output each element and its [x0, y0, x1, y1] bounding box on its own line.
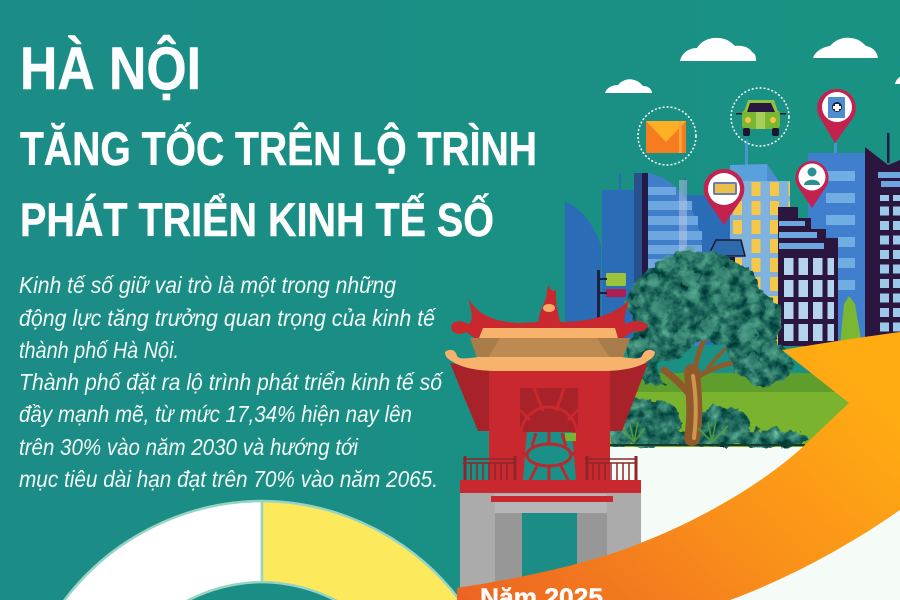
icon: battery pin — [704, 169, 744, 225]
icon: car — [731, 88, 789, 146]
intro text block: trên 30% vào năm 2030 và hướng tới — [19, 434, 359, 460]
orange growth arrow — [457, 332, 900, 600]
title — [20, 35, 537, 246]
intro text block: thành phố Hà Nội. — [19, 337, 179, 363]
intro text block — [19, 272, 444, 492]
upper roof — [451, 285, 648, 340]
round window — [520, 388, 578, 480]
trunk — [664, 340, 735, 438]
street sign — [597, 270, 626, 318]
yellow window building — [730, 140, 790, 346]
lower roof — [445, 350, 655, 371]
back buildings — [565, 173, 740, 350]
curved glass building — [634, 173, 702, 346]
tree — [622, 247, 795, 442]
small green cypress — [840, 296, 862, 345]
title: HÀ NỘI — [20, 35, 201, 102]
intro text block: đầy mạnh mẽ, từ mức 17,34% hiện nay lên — [19, 401, 412, 427]
foliage highlights — [632, 247, 777, 369]
crest eye — [543, 304, 555, 312]
right dark tower — [865, 133, 900, 345]
icon: envelope — [638, 107, 696, 165]
intro text block: Kinh tế số giữ vai trò là một trong những — [19, 272, 396, 298]
red base — [460, 480, 641, 493]
stepped dark building — [778, 207, 838, 346]
balustrade left — [463, 456, 515, 480]
green lawn — [610, 373, 850, 447]
icon: person pin — [795, 161, 829, 208]
intro text block: mục tiêu dài hạn đạt trên 70% vào năm 2065. — [19, 466, 438, 492]
intro text block: Thành phố đặt ra lộ trình phát triển kinh tế số — [19, 369, 444, 395]
icon: medical pin — [817, 89, 856, 143]
grey gate — [460, 493, 641, 593]
foliage — [625, 250, 795, 388]
title: TĂNG TỐC TRÊN LỘ TRÌNH — [20, 122, 537, 175]
city skyline — [565, 133, 900, 350]
light blue tower — [808, 143, 865, 348]
pavilion — [445, 285, 655, 593]
solar panel — [708, 240, 745, 269]
clouds — [605, 38, 900, 93]
shrubs — [609, 399, 808, 447]
tan roof body — [470, 338, 630, 358]
intro text block: động lực tăng trưởng quan trọng của kinh tế — [19, 305, 437, 331]
balustrade right — [585, 456, 637, 480]
donut chart — [63, 501, 461, 600]
grass tufts — [622, 420, 728, 442]
peach ridge — [479, 328, 618, 338]
main wall — [489, 371, 610, 483]
white ground — [600, 446, 900, 600]
title: PHÁT TRIỂN KINH TẾ SỐ — [20, 193, 494, 246]
dark eaves — [450, 363, 489, 431]
